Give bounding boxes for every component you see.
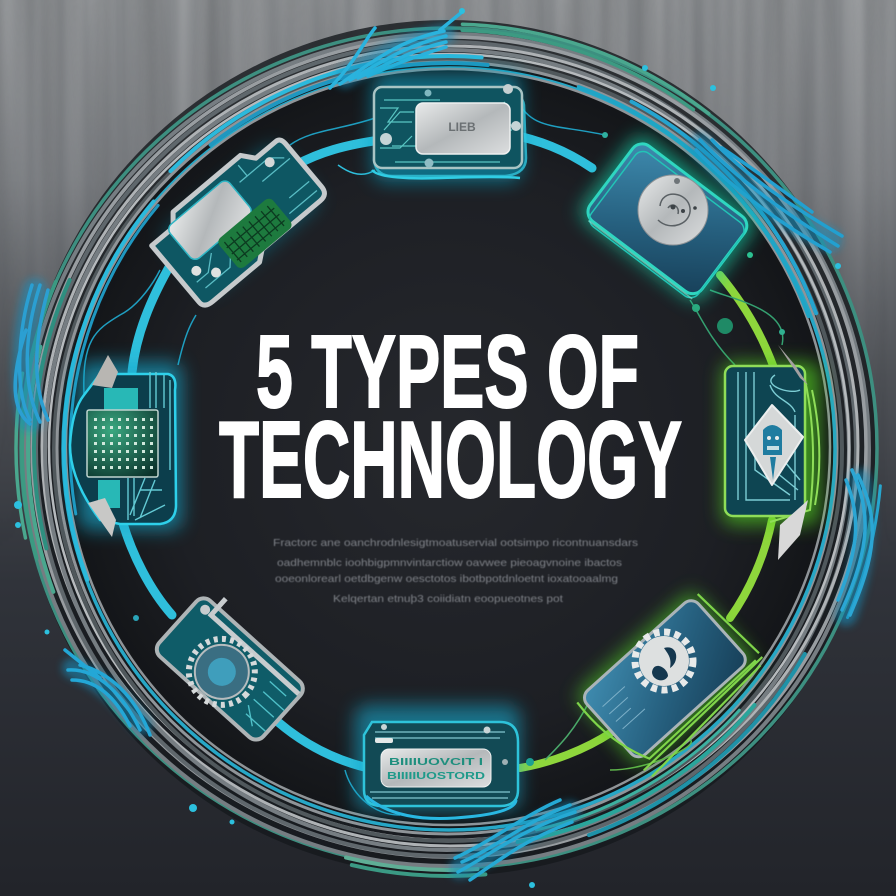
silver plate <box>381 749 491 787</box>
green chip <box>87 410 158 477</box>
title: 5 TYPES OF <box>256 314 639 429</box>
garbled body text: oadhemnblc ioohbigpmnvintarctiow oavwee pieoagvnoine ibactos <box>277 557 622 569</box>
connecting ring tubes <box>122 133 774 768</box>
module: left board with green chip <box>70 355 182 537</box>
garbled body text: Fractorc ane oanchrodnlesigtmoatuservial ootsimpo ricontnuansdars <box>273 537 638 549</box>
green grid <box>216 196 294 270</box>
module: right green board with shield badge <box>722 345 820 560</box>
silver tabs <box>92 355 118 388</box>
garbled body text: Kelqertan etnuþ3 coiidiatn eoopueotnes pot <box>333 593 563 605</box>
silver plate <box>166 178 254 262</box>
module: bottom silver display: BIIIIUOVCIT I <box>389 757 483 768</box>
module: top-right blue panel with silver disc <box>575 130 761 306</box>
central dark disc <box>60 60 836 836</box>
branch nodes <box>133 132 785 766</box>
thin branch wires <box>84 105 783 815</box>
module: bottom-left board with gear <box>151 585 315 746</box>
green tube sections <box>520 275 774 768</box>
cyan tube sections <box>122 133 592 768</box>
shield badge <box>745 405 803 485</box>
module: bottom-right blue panel with gear <box>568 580 772 781</box>
module: top circuit board <box>372 72 526 182</box>
gear icon <box>635 632 693 690</box>
module: top circuit board: LIEB <box>448 120 476 134</box>
title <box>219 314 682 521</box>
silver disc <box>638 175 708 245</box>
garbled body text <box>273 537 638 605</box>
garbled body text: ooeonlorearl oetdbgenw oesctotos ibotbpotdnloetnt ioxatooaalmg <box>275 573 618 585</box>
module: bottom silver display <box>355 705 520 819</box>
silver tabs <box>778 345 808 385</box>
module: bottom silver display: BIIIIIUOSTORD <box>387 771 485 782</box>
module: top-left circuit board with green grid <box>144 128 333 308</box>
gear icon <box>175 625 268 718</box>
